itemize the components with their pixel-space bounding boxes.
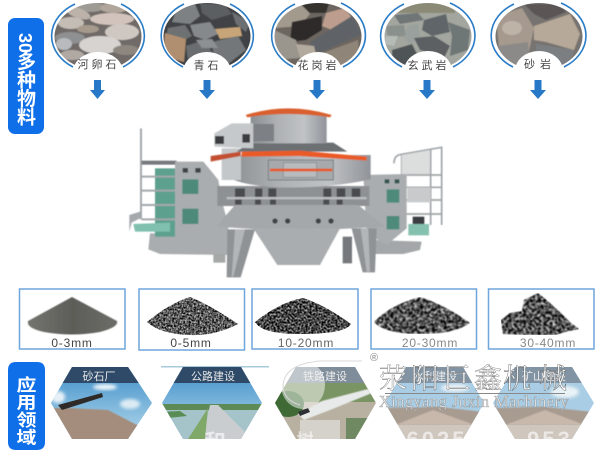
watermark: company name: 荥 — [379, 357, 407, 397]
machine left windows — [182, 179, 198, 224]
machine side bracket — [253, 124, 274, 141]
side tab: 应用领域 — [8, 362, 45, 450]
arrow — [199, 80, 215, 99]
machine left leg — [227, 229, 255, 277]
material: 砂岩 — [490, 2, 587, 70]
side tab: 30多种物料 — [8, 18, 44, 134]
machine bolts row — [235, 188, 360, 205]
application: 砂石厂: 砂石厂 — [82, 370, 116, 383]
material: 青石: 青石 — [194, 59, 222, 72]
watermark: contact digits: 树 — [296, 431, 314, 450]
application: 砂石厂 — [50, 367, 154, 440]
machine right windows — [387, 189, 399, 229]
machine right leg — [352, 228, 377, 272]
watermark: registered mark: ® — [370, 352, 378, 364]
application: 矿山建设 — [492, 367, 596, 440]
watermark: company name: 阳 — [411, 357, 439, 397]
material: 砂岩: 砂岩 — [524, 57, 556, 71]
watermark: company name — [379, 357, 567, 397]
application: 水利建设 — [384, 367, 486, 440]
material: 花岗岩 — [270, 2, 366, 70]
machine hopper — [253, 228, 340, 265]
output box: 0-5mm — [139, 289, 244, 350]
output box: 0-5mm: 0-5mm — [170, 336, 212, 350]
machine left column — [222, 148, 241, 180]
watermark: company name: 鑫 — [474, 357, 502, 397]
application: 铁路建设: 铁路建设 — [303, 369, 347, 383]
machine right railing — [394, 147, 442, 225]
machine feed chute — [214, 123, 253, 148]
machine orange flange — [242, 151, 367, 161]
machine frame bar — [227, 197, 367, 199]
watermark: divider line — [385, 393, 565, 394]
machine top ring — [246, 108, 332, 117]
machine right dark foot detail — [413, 217, 424, 224]
material: 玄武岩 — [380, 2, 476, 70]
machine left railing — [141, 128, 200, 219]
application: 矿山建设: 矿山建设 — [522, 369, 566, 383]
side tab: 30多种物料: 30 — [15, 33, 35, 53]
machine right mesh upper — [402, 150, 430, 174]
machine mid frame — [217, 186, 369, 206]
machine base holes — [272, 218, 334, 224]
output box: 10-20mm: 10-20mm — [278, 336, 334, 350]
output box: 20-30mm: 20-30mm — [402, 336, 458, 350]
machine left green tank — [155, 168, 176, 237]
machine left small holes — [183, 168, 201, 173]
application: 公路建设: 公路建设 — [191, 369, 235, 383]
machine right small holes — [385, 179, 399, 183]
machine base beam — [216, 205, 385, 229]
material: 玄武岩: 玄武岩 — [408, 58, 450, 72]
machine right panel — [363, 174, 407, 245]
side tab: 30多种物料: 料 — [17, 106, 36, 128]
machine left top rail — [142, 161, 177, 165]
material: 河卵石 — [50, 3, 146, 70]
machine feed chute window — [215, 134, 250, 144]
arrow — [530, 80, 546, 99]
arrow — [309, 80, 325, 99]
side tab: 应用领域: 用 — [17, 393, 36, 412]
side tab: 应用领域: 域 — [17, 428, 37, 447]
side tab: 应用领域: 领 — [17, 410, 37, 430]
side tab: 30多种物料: 多 — [17, 51, 36, 73]
machine right mesh — [407, 187, 431, 202]
watermark: company name: 械 — [539, 357, 567, 397]
output box: 0-3mm — [20, 289, 125, 350]
machine right teal foot — [408, 224, 429, 235]
application: 水利建设: 水利建设 — [413, 369, 457, 383]
side tab: 30多种物料: 种 — [17, 70, 36, 92]
material: 河卵石: 河卵石 — [78, 58, 120, 71]
machine door rail — [283, 163, 317, 177]
machine left leg inner — [232, 229, 245, 277]
watermark: company name: 巨 — [443, 357, 471, 397]
machine door — [268, 160, 333, 180]
machine left teal foot — [133, 223, 170, 232]
output box: 10-20mm — [252, 289, 358, 350]
machine lower platform right — [373, 240, 422, 254]
machine door bar — [270, 169, 332, 171]
output box: 30-40mm — [488, 289, 594, 350]
material: 花岗岩: 花岗岩 — [298, 58, 340, 72]
output box: 20-30mm — [371, 289, 476, 350]
machine: VSI sand maker — [129, 108, 442, 277]
side tab: 应用领域: 应 — [17, 375, 36, 395]
machine lower drum — [230, 155, 371, 187]
watermark: logo swoosh — [283, 361, 362, 405]
application: 铁路建设 — [275, 367, 376, 439]
machine lower platform left — [148, 233, 230, 255]
arrow — [419, 80, 435, 99]
watermark: company name: 机 — [503, 357, 531, 397]
application: 公路建设 — [160, 366, 269, 439]
output box: 0-3mm: 0-3mm — [51, 336, 93, 350]
machine left foot — [129, 212, 140, 232]
watermark: contact digits — [204, 427, 573, 450]
material: 青石 — [160, 3, 254, 70]
machine right shaft — [343, 237, 352, 263]
machine platform foot — [213, 254, 225, 263]
machine small orange accent — [211, 152, 241, 162]
watermark: English name: Xingyang Juxin Machinery — [379, 392, 569, 411]
output box: 30-40mm: 30-40mm — [520, 336, 576, 350]
machine upper drum — [251, 114, 327, 143]
machine left panel — [175, 162, 228, 247]
arrow — [90, 80, 105, 99]
machine upper collar — [237, 143, 347, 152]
side tab: 30多种物料: 物 — [17, 88, 36, 110]
machine right leg inner — [361, 228, 370, 272]
